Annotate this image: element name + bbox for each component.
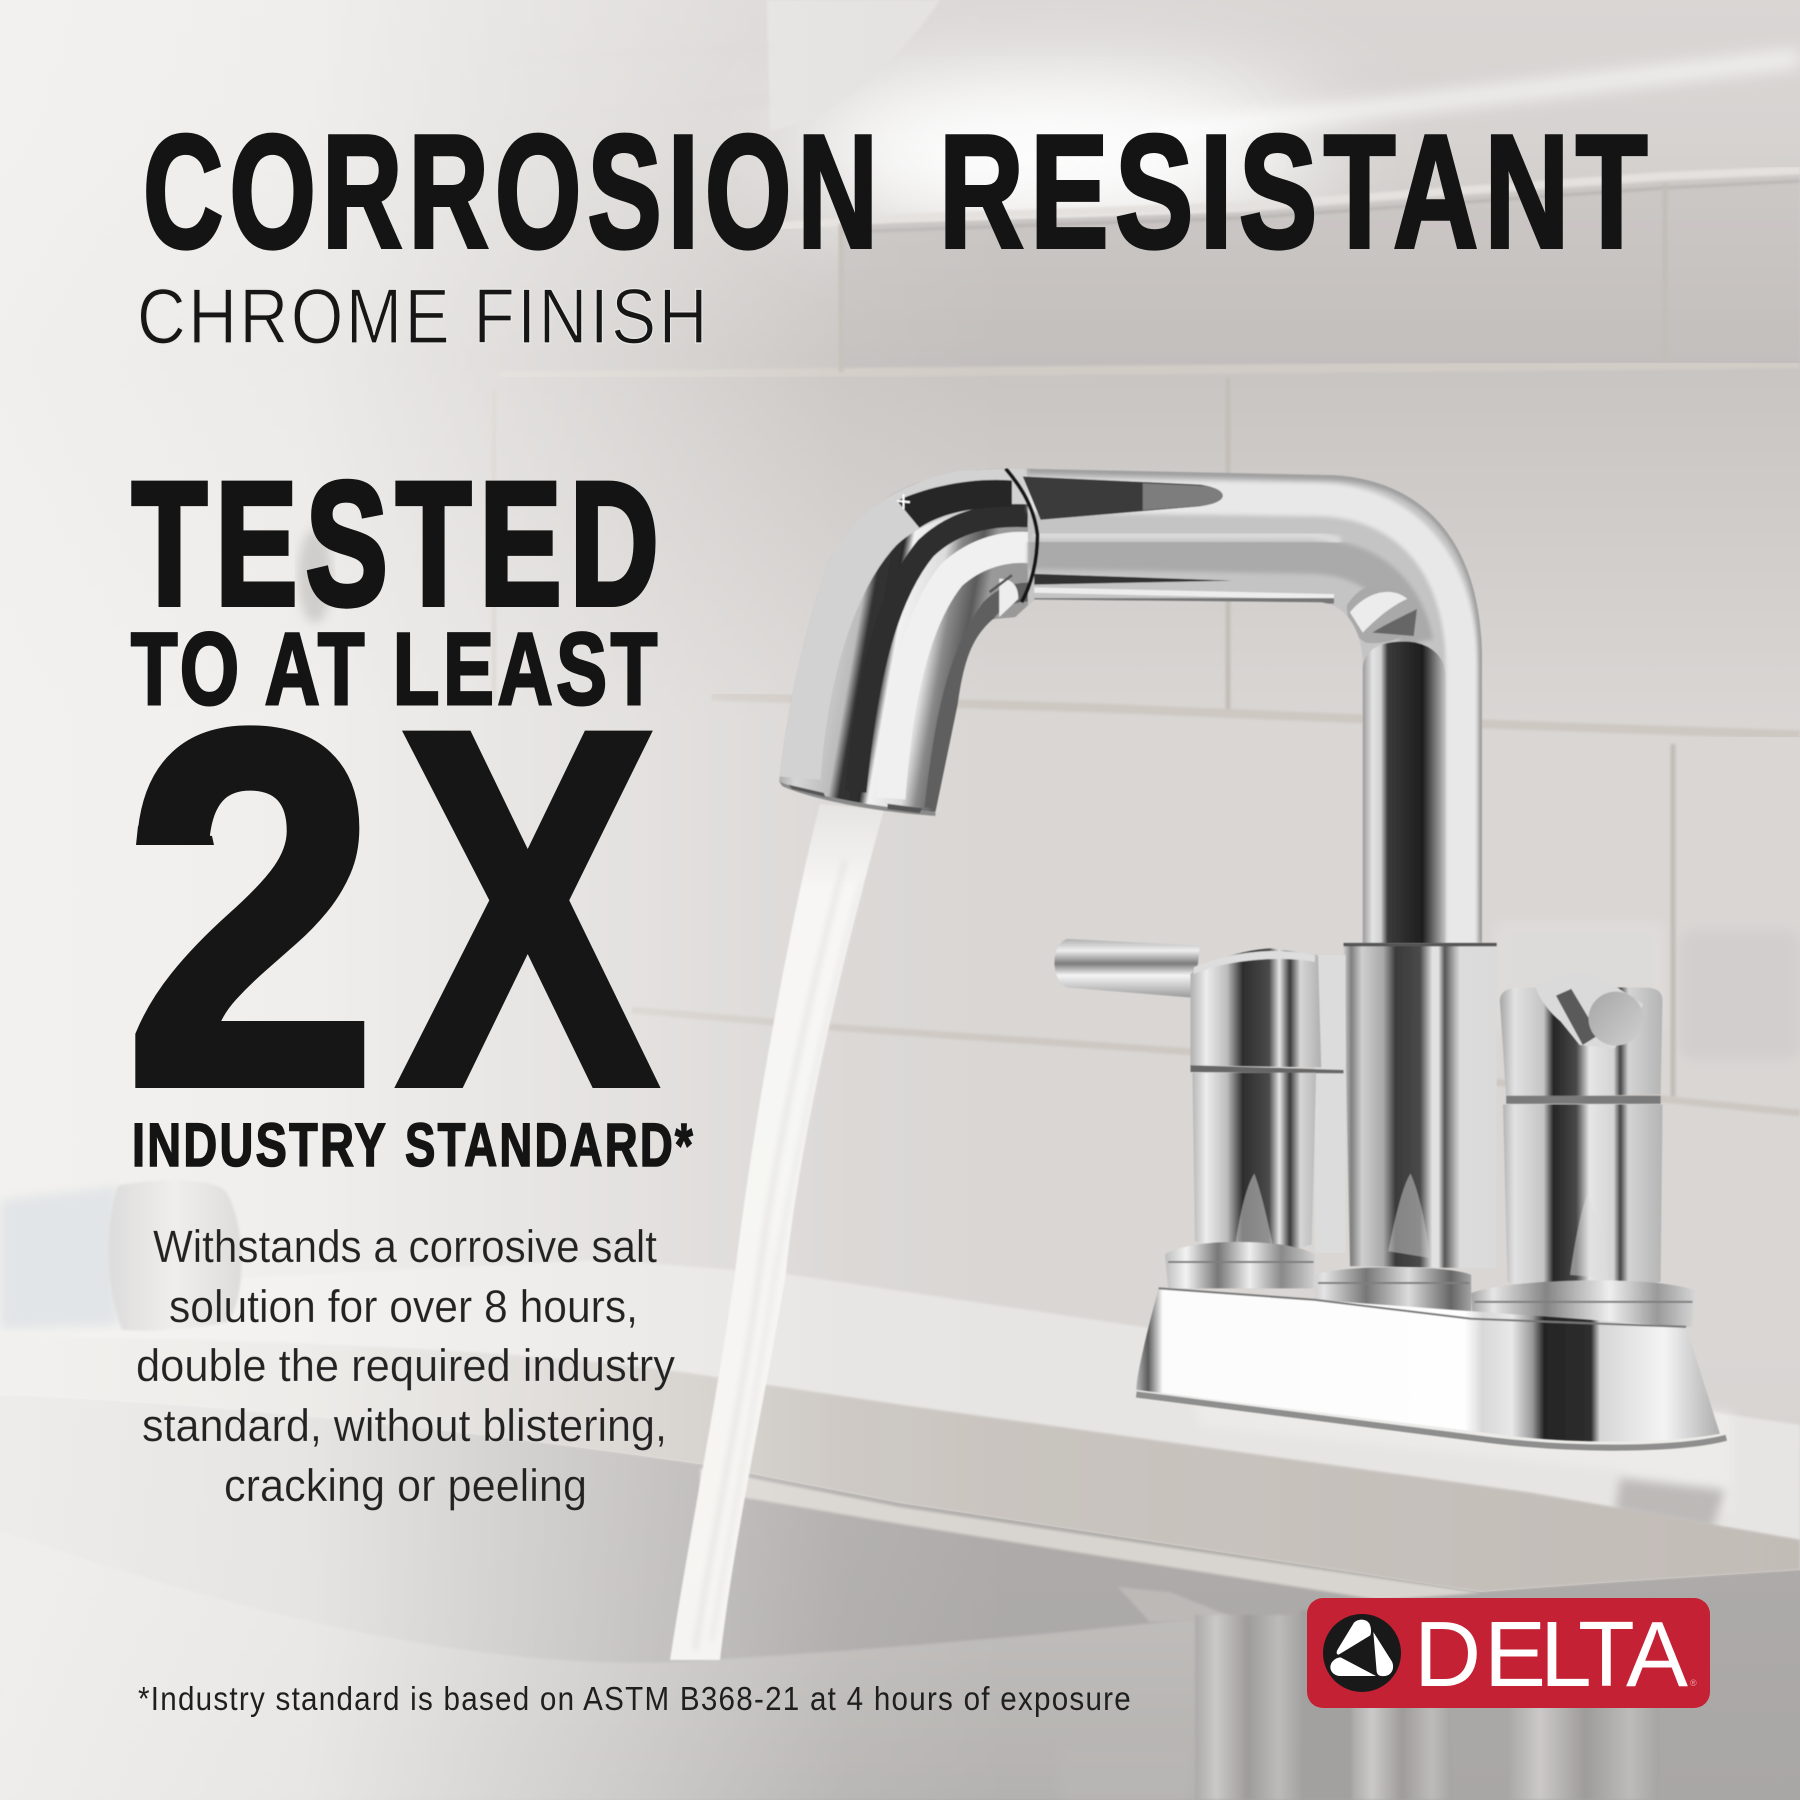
water stream (670, 804, 884, 1660)
claim: to at least: TO AT LEAST (131, 612, 661, 726)
body copy (136, 1221, 675, 1511)
claim: industry standard: STANDARD* (405, 1111, 695, 1179)
claim: industry standard (132, 1111, 695, 1179)
logo: Delta (1307, 1598, 1710, 1708)
footnote: *Industry standard is based on ASTM B368-21 at 4 hours of exposure (138, 1680, 1132, 1717)
faucet: left handle lever (1055, 939, 1200, 998)
heading: corrosion resistant: CORROSION (143, 102, 884, 282)
claim: 2X multiplier: 2 (124, 627, 378, 1191)
logo: Delta: ® (1690, 1678, 1697, 1688)
subheading: chrome finish: CHROME FINISH (137, 272, 710, 360)
faucet: polished chrome (760, 460, 1726, 1448)
claim: tested: TESTED (132, 447, 667, 642)
body copy: cracking or peeling (224, 1460, 587, 1511)
faucet: spout and riser (760, 460, 1487, 947)
faucet: right handle lever (1535, 973, 1643, 1048)
faucet: base rings (1165, 1242, 1694, 1330)
faucet: left handle (1191, 948, 1346, 1253)
body copy: double the required industry (136, 1340, 675, 1391)
logo: Delta: DELTA (1414, 1602, 1688, 1706)
body copy: standard, without blistering, (142, 1400, 667, 1451)
claim: industry standard: INDUSTRY (132, 1111, 388, 1179)
claim: 2X multiplier: X (398, 627, 659, 1191)
faucet: right handle (1500, 988, 1662, 1294)
faucet: centre hub (1344, 943, 1497, 1268)
body copy: solution for over 8 hours, (169, 1281, 638, 1332)
icon: Delta triangle mark (1323, 1614, 1401, 1692)
faucet: base plate (1136, 1288, 1726, 1448)
body copy: Withstands a corrosive salt (153, 1221, 657, 1272)
claim: 2X multiplier (124, 627, 659, 1191)
